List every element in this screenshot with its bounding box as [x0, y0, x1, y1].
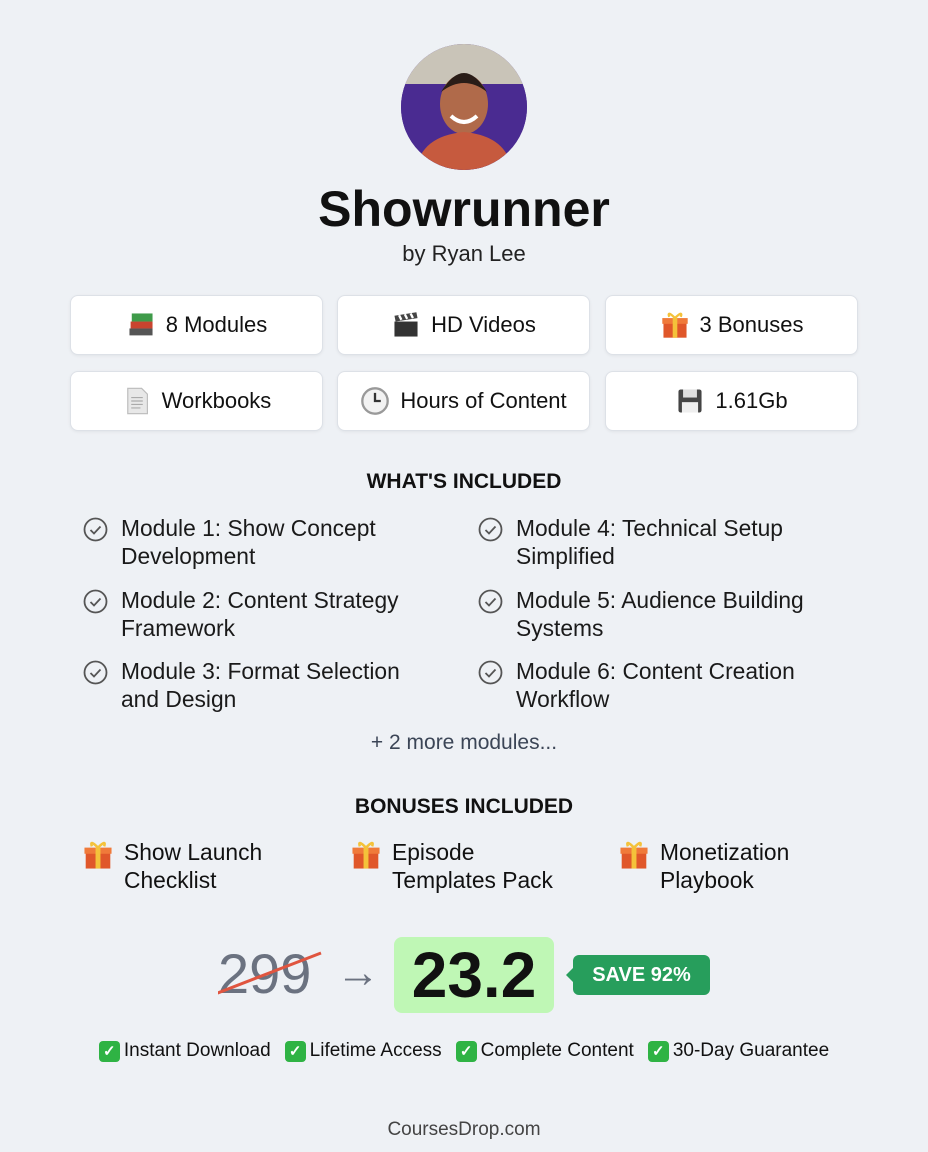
stat cards — [70, 295, 858, 432]
card: modules: 8 Modules — [166, 312, 267, 337]
module list: Systems — [516, 615, 603, 641]
card: hours — [337, 371, 590, 431]
card: workbooks — [70, 371, 323, 431]
avatar — [401, 44, 527, 170]
arrow: → — [336, 948, 380, 997]
more modules note: + 2 more modules... — [371, 731, 557, 754]
bonus list: Episode — [392, 839, 474, 865]
card: size: 1.61Gb — [715, 388, 788, 413]
module list: Module 2: Content Strategy — [121, 587, 399, 613]
bonus list: Playbook — [660, 867, 754, 893]
card: videos: HD Videos — [431, 312, 536, 337]
title: Showrunner — [318, 181, 610, 237]
module list: Module 1: Show Concept — [121, 515, 376, 541]
new price: 23.2 — [412, 939, 536, 1011]
module list — [84, 515, 804, 712]
feature badges — [99, 1040, 829, 1062]
bonus list: Monetization — [660, 839, 789, 865]
feature badges: ✓ — [289, 1042, 301, 1060]
feature badges: Lifetime Access — [310, 1040, 442, 1061]
module list: Module 5: Audience Building — [516, 587, 804, 613]
bonus list: Checklist — [124, 867, 216, 893]
module list: Workflow — [516, 686, 609, 712]
bonus list — [84, 839, 789, 893]
card: workbooks: Workbooks — [162, 388, 271, 413]
heading: what's included: WHAT'S INCLUDED — [367, 470, 561, 493]
bonus list: Show Launch — [124, 839, 262, 865]
feature badges: ✓ — [652, 1042, 665, 1060]
module list: Development — [121, 543, 255, 569]
bonus list: Templates Pack — [392, 867, 553, 893]
card: hours: Hours of Content — [400, 388, 567, 413]
module list: Simplified — [516, 543, 615, 569]
module list: Framework — [121, 615, 235, 641]
feature badges: Complete Content — [481, 1040, 634, 1061]
feature badges: 30-Day Guarantee — [673, 1040, 829, 1061]
module list: Module 6: Content Creation — [516, 658, 795, 684]
card: size — [605, 371, 858, 431]
module list: Module 3: Format Selection — [121, 658, 400, 684]
card: modules — [70, 295, 323, 355]
feature badges: ✓ — [460, 1042, 472, 1060]
card: videos — [337, 295, 590, 355]
save badge — [573, 955, 710, 995]
feature badges: ✓ — [103, 1042, 116, 1060]
old price: 299 — [218, 942, 311, 1005]
card: bonuses: 3 Bonuses — [700, 312, 803, 337]
save badge: SAVE 92% — [592, 964, 691, 986]
module list: and Design — [121, 686, 236, 712]
footer: CoursesDrop.com — [387, 1119, 541, 1140]
feature badges: Instant Download — [124, 1040, 271, 1061]
subtitle: by Ryan Lee — [402, 241, 526, 266]
module list: Module 4: Technical Setup — [516, 515, 783, 541]
card: bonuses — [605, 295, 858, 355]
heading: bonuses: BONUSES INCLUDED — [355, 795, 573, 818]
